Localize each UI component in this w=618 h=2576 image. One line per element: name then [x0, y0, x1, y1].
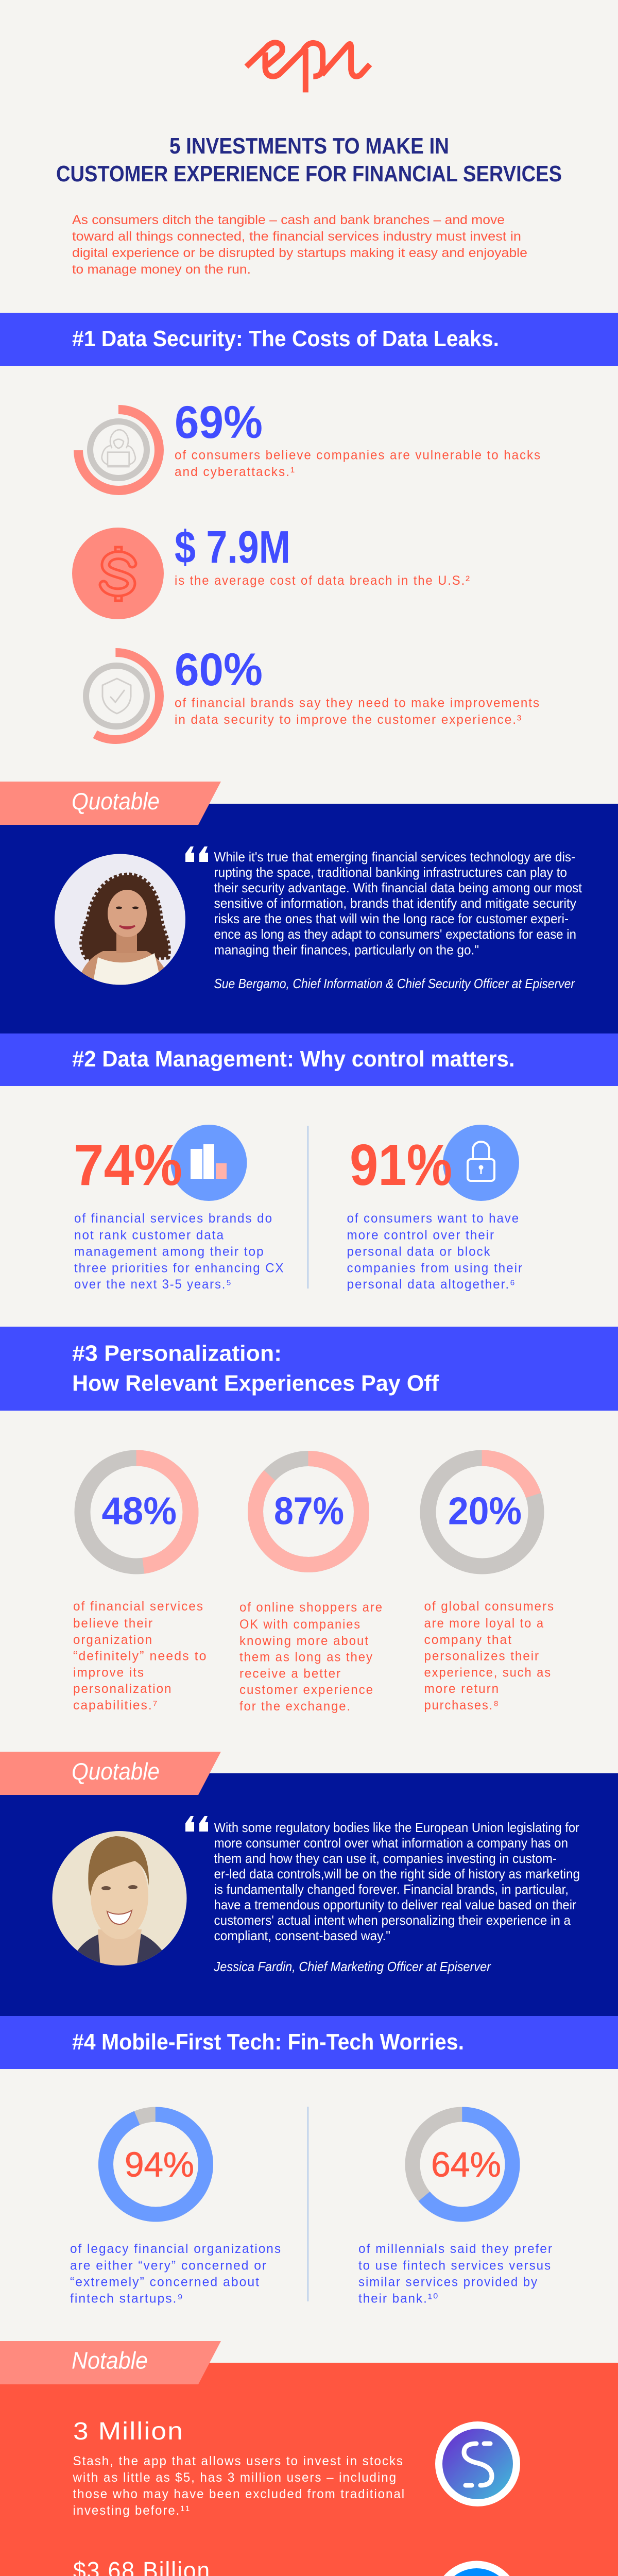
description: more control over their	[347, 1228, 495, 1243]
description: of online shoppers are	[239, 1600, 383, 1615]
description: for the exchange.	[239, 1699, 351, 1714]
tag: Notable	[72, 2347, 148, 2374]
quote text: With some regulatory bodies like the European Union legislating for	[214, 1820, 579, 1835]
section header 2: #2 Data Management: Why control matters.	[72, 1046, 515, 1072]
donut chart	[255, 1459, 362, 1565]
donut chart	[413, 2114, 512, 2214]
figure: $ 7.9M	[175, 521, 290, 573]
title	[56, 133, 562, 187]
section header 2	[0, 1033, 618, 1086]
description: Stash: with as little as $5, has 3 million users – including	[73, 2470, 397, 2485]
section header 3: #3 Personalization:	[72, 1341, 282, 1366]
description: similar services provided by	[358, 2275, 538, 2290]
description	[175, 448, 541, 479]
section header 3: How Relevant Experiences Pay Off	[72, 1371, 439, 1396]
description: them as long as they	[239, 1650, 373, 1665]
quote text: er-led data controls,will be on the right side of history as marketing	[214, 1866, 580, 1882]
icon: lock	[443, 1125, 519, 1201]
quote text: customers' actual intent when personalizing their experience in a	[214, 1912, 571, 1928]
figure: 94%	[125, 2145, 194, 2184]
section header 1: #1 Data Security: The Costs of Data Leaks.	[72, 326, 499, 351]
icon: dollar	[72, 528, 164, 619]
quote text: managing their finances, particularly on the go."	[214, 942, 479, 958]
quote text: sensitive of information, brands that identify and mitigate security	[214, 895, 576, 911]
tag	[0, 1752, 221, 1795]
quote text: rupting the space, traditional banking infrastructures can play to	[214, 865, 567, 880]
description: capabilities.⁷	[73, 1698, 159, 1713]
description: Stash: investing before.¹¹	[73, 2503, 191, 2518]
tag: Quotable	[72, 1758, 160, 1785]
figure: 74%	[74, 1132, 182, 1197]
description: of financial brands say they need to make improvements	[175, 696, 540, 710]
stat: 91%	[347, 1125, 523, 1292]
section header 4: #4 Mobile-First Tech: Fin-Tech Worries.	[72, 2029, 464, 2055]
description: over the next 3-5 years.⁵	[74, 1277, 232, 1292]
description: not rank customer data	[74, 1228, 225, 1243]
donut icon: hacker	[78, 410, 159, 490]
description: purchases.⁸	[424, 1698, 500, 1713]
intro text: digital experience or be disrupted by startups making it easy and enjoyable	[72, 246, 527, 260]
quote text: more consumer control over what information a company has on	[214, 1835, 568, 1851]
quote text: While it's true that emerging financial services technology are dis-	[214, 849, 575, 865]
quote text: is fundamentally changed forever. Financial brands, in particular,	[214, 1882, 569, 1897]
panel: notable	[0, 2341, 618, 2576]
description: personal data or block	[347, 1245, 491, 1259]
description: of legacy financial organizations	[70, 2242, 282, 2256]
description: more return	[424, 1682, 500, 1696]
icon: Stash app	[435, 2421, 520, 2506]
section header 1	[0, 313, 618, 366]
photo: Sue Bergamo	[55, 854, 185, 985]
photo: Jessica Fardin	[52, 1829, 191, 1968]
quote text: risks are the ones that will win the long race for customer experi-	[214, 911, 569, 926]
figure: 87%	[274, 1489, 344, 1532]
section header 3	[0, 1327, 618, 1411]
description: OK with companies	[239, 1617, 361, 1632]
description: knowing more about	[239, 1634, 369, 1648]
description: three priorities for enhancing CX	[74, 1261, 284, 1275]
figure: 20%	[448, 1489, 522, 1532]
figure: 3 million: 3 Million	[73, 2418, 184, 2445]
description: improve its	[73, 1665, 145, 1680]
logo: Epi top	[246, 43, 370, 92]
stat: 48%	[73, 1458, 207, 1713]
quote text: their security advantage. With financial data being among our most	[214, 880, 582, 895]
quote text	[214, 1820, 580, 1943]
description: Stash: Stash, the app that allows users to invest in stocks	[73, 2454, 404, 2468]
stat: 64%	[358, 2114, 553, 2306]
icon: bar chart	[171, 1125, 247, 1201]
quote mark	[185, 846, 208, 862]
quote text: have a tremendous opportunity to deliver real value based on their	[214, 1897, 576, 1912]
description: and cyberattacks.¹	[175, 465, 296, 479]
panel: quotable 1	[0, 782, 618, 1033]
figure: 60%	[175, 643, 263, 695]
description: of financial services brands do	[74, 1211, 273, 1226]
description	[239, 1600, 383, 1714]
attribution: Jessica Fardin, Chief Marketing Officer at Episerver	[214, 1959, 491, 1974]
description: is the average cost of data breach in the U.S.²	[175, 573, 471, 588]
stat: 94%	[70, 2114, 282, 2306]
intro text: As consumers ditch the tangible – cash and bank branches – and move	[72, 213, 505, 227]
description: fintech startups.⁹	[70, 2291, 184, 2306]
quote text: compliant, consent-based way."	[214, 1928, 390, 1943]
tag: Quotable	[72, 788, 160, 815]
description: personal data altogether.⁶	[347, 1277, 516, 1292]
intro text: toward all things connected, the financial services industry must invest in	[72, 229, 521, 244]
description: in data security to improve the customer experience.³	[175, 713, 522, 727]
description: of consumers want to have	[347, 1211, 520, 1226]
figure: 48%	[102, 1489, 177, 1532]
stat: 87%	[239, 1459, 383, 1714]
quote mark	[185, 1816, 208, 1832]
section header 4	[0, 2016, 618, 2069]
description	[73, 1599, 207, 1713]
title: 5 INVESTMENTS TO MAKE IN	[169, 133, 449, 159]
description: to use fintech services versus	[358, 2259, 552, 2273]
description: “extremely” concerned about	[70, 2275, 260, 2290]
quote text: them and how they can use it, companies investing in custom-	[214, 1851, 557, 1866]
description: of global consumers	[424, 1599, 555, 1614]
description: are either “very” concerned or	[70, 2259, 267, 2273]
description: experience, such as	[424, 1665, 552, 1680]
description: company that	[424, 1633, 512, 1647]
description	[70, 2242, 282, 2306]
stat: $7.9M	[72, 521, 471, 619]
description	[424, 1599, 555, 1713]
donut chart	[106, 2114, 206, 2214]
description: of consumers believe companies are vulnerable to hacks	[175, 448, 541, 463]
description: organization	[73, 1633, 153, 1647]
stat: 20%	[424, 1458, 555, 1713]
donut icon: shield	[72, 652, 160, 740]
description: companies from using their	[347, 1261, 523, 1275]
quote text: ence as long as they adapt to consumers' expectations for ease in	[214, 926, 576, 942]
tag	[0, 782, 221, 825]
quote text	[214, 849, 582, 958]
description	[175, 696, 540, 727]
attribution: Sue Bergamo, Chief Information & Chief Security Officer at Episerver	[214, 976, 575, 991]
description: management among their top	[74, 1245, 265, 1259]
description: believe their	[73, 1616, 153, 1631]
description	[74, 1211, 284, 1292]
description: receive a better	[239, 1666, 341, 1681]
intro text	[72, 213, 527, 277]
donut chart	[82, 1458, 191, 1566]
description: “definitely” needs to	[73, 1649, 207, 1664]
description	[358, 2242, 553, 2306]
figure: 91%	[350, 1132, 452, 1197]
panel: quotable 2	[0, 1752, 618, 2016]
description: their bank.¹⁰	[358, 2291, 439, 2306]
figure: 64%	[431, 2145, 501, 2184]
description: personalizes their	[424, 1649, 540, 1664]
description: Stash: those who may have been excluded from traditional	[73, 2487, 405, 2501]
tag	[0, 2341, 221, 2384]
stat: 74%	[74, 1125, 284, 1292]
description	[347, 1211, 523, 1292]
description: customer experience	[239, 1683, 374, 1697]
stat: 60%	[72, 643, 540, 740]
description: of financial services	[73, 1599, 204, 1614]
description: are more loyal to a	[424, 1616, 544, 1631]
description: personalization	[73, 1682, 172, 1696]
donut chart	[428, 1458, 536, 1566]
icon: Venmo app	[433, 2561, 520, 2576]
description: of millennials said they prefer	[358, 2242, 553, 2256]
intro text: to manage money on the run.	[72, 262, 251, 277]
figure: 69%	[175, 396, 263, 448]
description: Stash	[73, 2454, 405, 2518]
stat: 69%	[78, 396, 541, 490]
